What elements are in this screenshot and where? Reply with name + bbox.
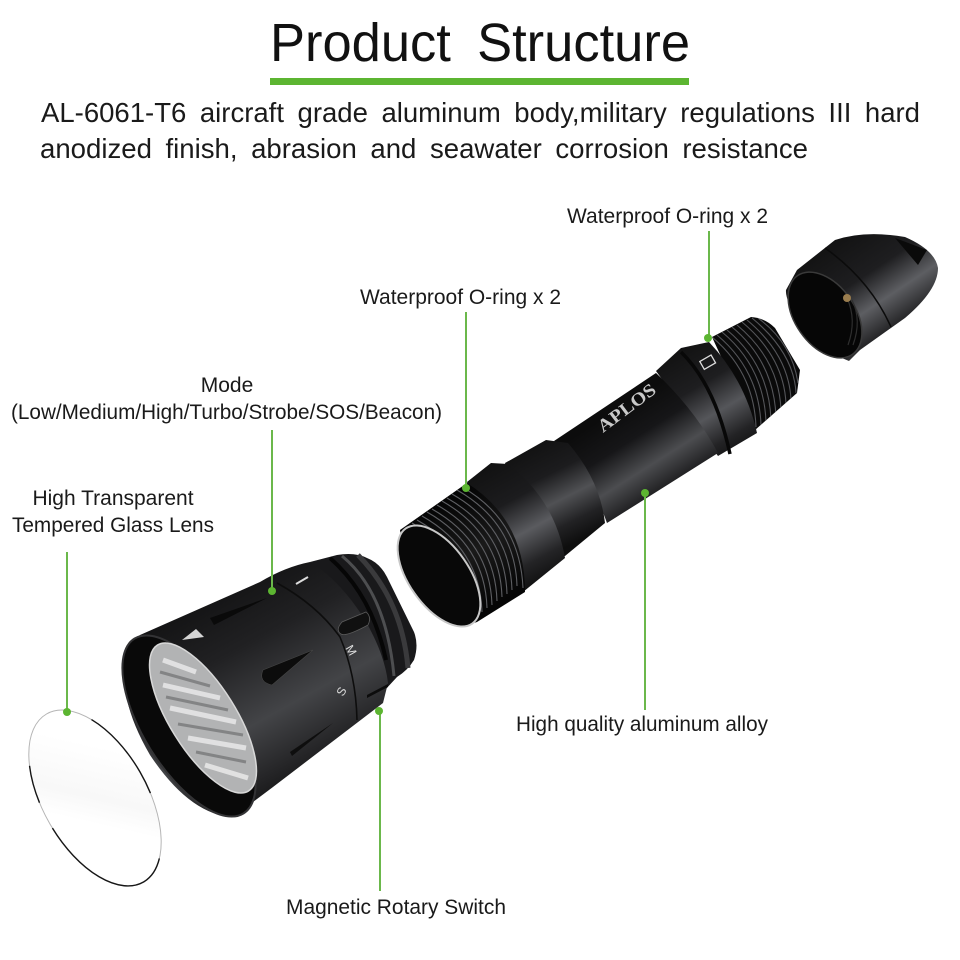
ring edge xyxy=(277,583,357,720)
tail cap xyxy=(773,234,938,372)
callout: waterproof o-ring rear: Waterproof O-ring x 2 xyxy=(567,205,768,228)
collar second xyxy=(505,440,605,560)
opening xyxy=(381,511,497,641)
callout: magnetic rotary switch: Magnetic Rotary Switch xyxy=(286,896,506,919)
description text: AL-6061-T6 aircraft grade aluminum body,military regulations III hard xyxy=(41,97,920,128)
description text xyxy=(40,97,920,164)
bezel xyxy=(96,615,282,837)
description text: anodized finish, abrasion and seawater corrosion resistance xyxy=(40,133,808,164)
grooves on head xyxy=(210,598,267,625)
threaded end rear xyxy=(712,317,800,430)
callout: waterproof o-ring front xyxy=(360,286,561,492)
callout: aluminum alloy: High quality aluminum alloy xyxy=(516,713,768,736)
neck rings xyxy=(310,554,416,690)
callout: lens: High Transparent xyxy=(32,487,194,510)
flashlight head: M xyxy=(342,642,360,658)
callout: waterproof o-ring rear xyxy=(567,205,768,342)
lens xyxy=(1,688,189,908)
flashlight body xyxy=(381,317,800,641)
head body xyxy=(124,562,388,817)
battery icon xyxy=(700,355,716,369)
icons on head xyxy=(182,629,204,640)
callout: waterproof o-ring front: Waterproof O-ring x 2 xyxy=(360,286,561,309)
main tube xyxy=(554,373,718,523)
title: Product Structure xyxy=(270,13,690,73)
callout: aluminum alloy xyxy=(516,489,768,736)
callout: mode: Mode xyxy=(201,374,253,397)
callout: lens: Tempered Glass Lens xyxy=(12,514,214,537)
collar front xyxy=(467,463,565,592)
callout: mode: (Low/Medium/High/Turbo/Strobe/SOS/Beacon) xyxy=(11,401,442,424)
flashlight head xyxy=(96,554,416,837)
threaded end front xyxy=(400,483,525,623)
brand text: APLOS xyxy=(593,379,660,436)
callout: mode xyxy=(11,374,442,595)
callout: lens xyxy=(12,487,214,716)
LED reflector xyxy=(129,628,277,808)
flashlight head: S xyxy=(333,685,350,698)
tail collar xyxy=(656,342,757,456)
callout: magnetic rotary switch xyxy=(286,707,506,919)
